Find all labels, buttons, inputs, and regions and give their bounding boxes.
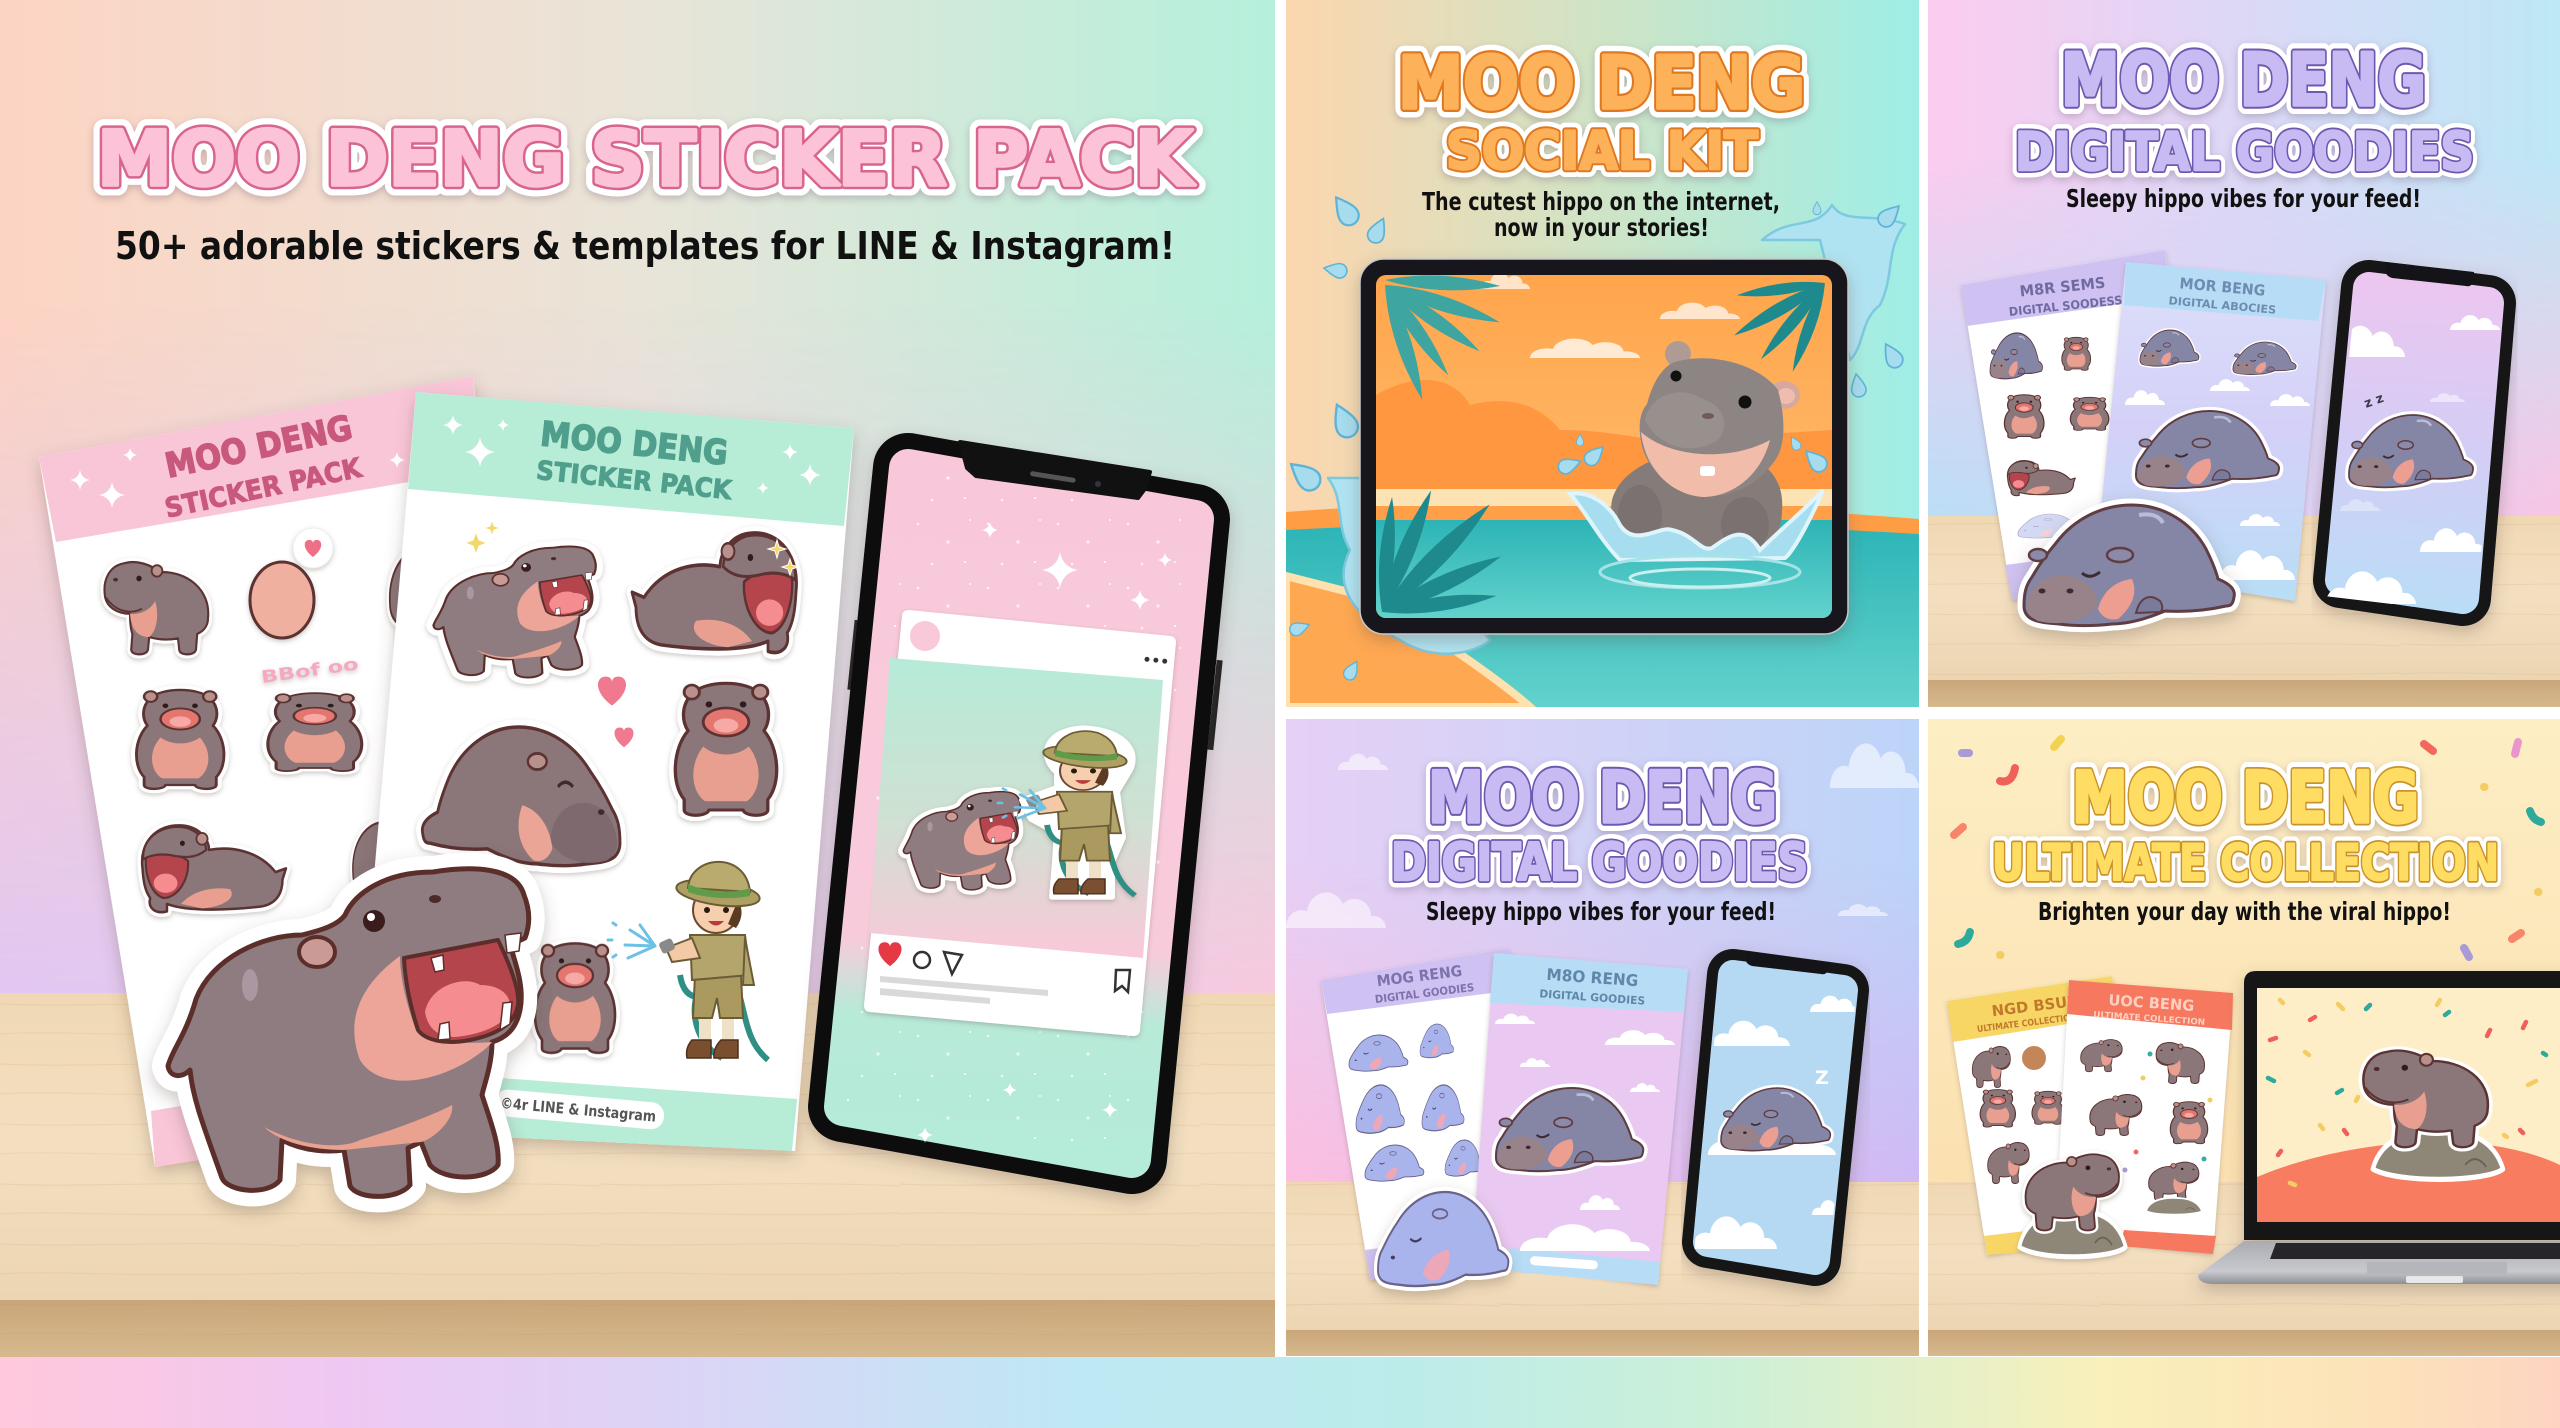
lilac background <box>1286 719 1919 1189</box>
yellow sheet label: ULTIMATE COLLECTION <box>1977 1013 2077 1035</box>
background clouds <box>1286 743 1919 928</box>
social kit title: SOCIAL KIT <box>1446 121 1758 182</box>
main subtitle: 50+ adorable stickers & templates for LINE & Instagram! <box>115 224 1175 268</box>
purple sheet stickers <box>1349 1024 1483 1181</box>
bottom rainbow strip <box>0 1357 2560 1428</box>
wooden table <box>0 993 1275 1357</box>
main title: MOO DENG STICKER PACK <box>97 114 1196 203</box>
table <box>1928 516 2560 707</box>
purple sheet <box>1961 250 2210 600</box>
digital goodies title: DIGITAL GOODIES <box>2015 122 2474 183</box>
digital goodies background <box>1928 0 2560 520</box>
palm leaves top right <box>1734 282 1825 372</box>
mint sticker sheet <box>352 392 854 1151</box>
sparkles and hearts near stickers <box>465 520 798 747</box>
yellow sheet stickers <box>1972 1046 2064 1184</box>
bottom goodies title: MOO DENG <box>1428 757 1777 839</box>
digital goodies title <box>2015 38 2474 183</box>
phone mockup <box>843 442 1223 1159</box>
yellow sheet <box>1947 976 2150 1255</box>
social kit title: SOCIAL KIT <box>1446 121 1758 182</box>
phone clouds <box>2326 315 2500 604</box>
avatar <box>910 621 940 651</box>
orange sheet stickers <box>2081 1040 2208 1215</box>
z mark: Z <box>1815 1067 1829 1089</box>
laptop hippo <box>2363 1051 2488 1147</box>
social post card <box>869 616 1170 1030</box>
orange shore and teal water <box>1286 503 1919 707</box>
tablet mockup <box>1360 259 1848 634</box>
mint sheet heading: MOO DENG <box>539 414 730 474</box>
bottom goodies title: MOO DENG <box>1428 757 1777 839</box>
more dots: ••• <box>1142 652 1170 671</box>
lavender sheet label <box>1539 965 1646 1008</box>
digital goodies title: DIGITAL GOODIES <box>2015 122 2474 183</box>
social kit subtitle: The cutest hippo on the internet, <box>1422 187 1780 216</box>
post action icons <box>878 942 1130 992</box>
pink sheet heading <box>162 408 365 525</box>
panel: social kit <box>1284 0 1919 707</box>
tablet clouds <box>1480 273 1740 358</box>
blue sheet label <box>2168 274 2277 317</box>
yellow sheet label <box>1977 992 2078 1035</box>
phone sleeping hippo <box>2349 415 2473 487</box>
social kit title <box>1398 41 1805 182</box>
bottom goodies title: DIGITAL GOODIES <box>1391 833 1808 893</box>
splash crown <box>1556 434 1830 588</box>
confetti <box>1954 739 2541 957</box>
laptop base <box>2198 1241 2560 1284</box>
pink sheet hippo stickers: BBof oo <box>260 655 360 688</box>
table <box>1286 1182 1919 1356</box>
digital goodies title: MOO DENG <box>2061 38 2426 122</box>
phone hippo on cloud <box>1721 1088 1830 1151</box>
pink sheet heading: MOO DENG <box>162 408 356 487</box>
blue sheet clouds <box>2125 379 2310 580</box>
social kit title: SOCIAL KIT <box>1446 121 1758 182</box>
ultimate title <box>1992 757 2499 892</box>
panel: digital goodies bottom <box>1286 719 1919 1356</box>
water spray <box>608 923 655 958</box>
digital goodies title: MOO DENG <box>2061 38 2426 122</box>
palm leaves bottom left <box>1378 490 1501 614</box>
purple sheet label <box>1374 962 1475 1006</box>
orange sheet <box>2055 980 2233 1254</box>
lavender sheet <box>1472 953 1688 1285</box>
water splashes <box>1328 205 1905 654</box>
panel: main sticker pack <box>0 0 1275 1357</box>
mint sheet heading <box>535 414 734 506</box>
mint sheet hippo stickers <box>422 533 797 1053</box>
social kit title: MOO DENG <box>1398 41 1805 125</box>
purple sheet label: M8R SEMS <box>2019 274 2106 300</box>
purple sheet label <box>2008 274 2123 319</box>
pink sticker sheet <box>39 376 540 1167</box>
purple sheet <box>1321 948 1560 1280</box>
safari boy sticker with hose <box>655 858 768 1062</box>
purple sheet label: DIGITAL SOODESS <box>2008 293 2123 319</box>
social kit title: MOO DENG <box>1398 41 1805 125</box>
phone mockup <box>2326 262 2500 604</box>
hippo on rock sticker <box>2019 1154 2126 1257</box>
digital goodies subtitle: Sleepy hippo vibes for your feed! <box>2066 184 2421 213</box>
phone clouds <box>1692 996 1860 1249</box>
lavender sheet label: DIGITAL GOODIES <box>1539 987 1646 1008</box>
yellow sheet label: NGD BSUE <box>1991 992 2078 1020</box>
table <box>1928 1182 2560 1356</box>
laptop confetti <box>2268 1000 2546 1185</box>
phone glitter <box>917 522 1172 1143</box>
ultimate title: MOO DENG <box>2072 757 2419 839</box>
main title: MOO DENG STICKER PACK <box>97 114 1196 203</box>
purple sheet stickers <box>1990 333 2109 538</box>
large open-mouth hippo sticker <box>168 869 529 1196</box>
pink sheet sparkles <box>70 448 405 508</box>
mint sheet heading: STICKER PACK <box>535 456 734 506</box>
digital goodies title: MOO DENG <box>2061 38 2426 122</box>
lavender sheet hippo <box>1496 1088 1643 1171</box>
orange sheet confetti <box>2122 1052 2212 1172</box>
ultimate title: MOO DENG <box>2072 757 2419 839</box>
blue sheet <box>2095 262 2326 601</box>
laptop notch <box>2406 1276 2463 1283</box>
bottom goodies title: DIGITAL GOODIES <box>1391 833 1808 893</box>
z marks: z z <box>2362 391 2386 412</box>
orange sheet label: ULTIMATE COLLECTION <box>2093 1010 2205 1028</box>
lavender sheet clouds <box>1495 1014 1675 1251</box>
water droplets <box>1284 192 1906 682</box>
tablet screen scene <box>1374 273 1832 619</box>
mint sheet sparkles <box>443 415 821 494</box>
keyboard <box>2270 1243 2560 1259</box>
orange sheet label <box>2093 991 2205 1028</box>
plush hippo <box>1611 341 1800 553</box>
pink sheet hippo stickers <box>104 528 476 914</box>
main title: MOO DENG STICKER PACK <box>97 114 1196 203</box>
blue sheet label: DIGITAL ABOCIES <box>2168 294 2277 317</box>
bottom goodies title: DIGITAL GOODIES <box>1391 833 1808 893</box>
laptop red hill <box>2257 1142 2560 1222</box>
phone mockup <box>1692 952 1860 1260</box>
ultimate title: MOO DENG <box>2072 757 2419 839</box>
pink sheet heading: STICKER PACK <box>162 453 365 525</box>
social kit background <box>1286 0 1919 520</box>
large sleeping hippo sticker <box>2024 505 2234 626</box>
blue sheet label: MOR BENG <box>2179 274 2266 300</box>
yellow background <box>1928 719 2560 1189</box>
lavender sheet footer pill <box>1530 1256 1598 1270</box>
trackpad <box>2367 1262 2507 1274</box>
footer pill label: ©4r LINE & Instagram <box>500 1094 657 1126</box>
orange sheet label: UOC BENG <box>2108 991 2195 1015</box>
post hippo and boy <box>903 728 1135 897</box>
purple sheet label: DIGITAL GOODIES <box>1374 981 1475 1006</box>
panel: digital goodies top <box>1928 0 2560 707</box>
bottom goodies title <box>1391 757 1808 893</box>
laptop <box>2198 971 2560 1284</box>
caption lines <box>880 976 1048 1004</box>
palm leaves top left <box>1385 276 1500 400</box>
laptop rock <box>2373 1130 2503 1179</box>
main background gradient <box>0 0 1275 1000</box>
social kit title: MOO DENG <box>1398 41 1805 125</box>
lavender sheet label: M8O RENG <box>1546 965 1639 990</box>
digital goodies title: DIGITAL GOODIES <box>2015 122 2474 183</box>
blue sleeping hippo sticker <box>1378 1192 1508 1286</box>
bottom goodies title: MOO DENG <box>1428 757 1777 839</box>
panel: ultimate collection <box>1928 719 2560 1356</box>
tablet hills <box>1376 380 1832 490</box>
bottom goodies subtitle: Sleepy hippo vibes for your feed! <box>1426 897 1776 926</box>
blue sheet stickers <box>2136 330 2296 488</box>
social kit subtitle <box>1422 187 1780 242</box>
social kit subtitle: now in your stories! <box>1494 213 1709 242</box>
purple sheet label: MOG RENG <box>1376 962 1463 990</box>
